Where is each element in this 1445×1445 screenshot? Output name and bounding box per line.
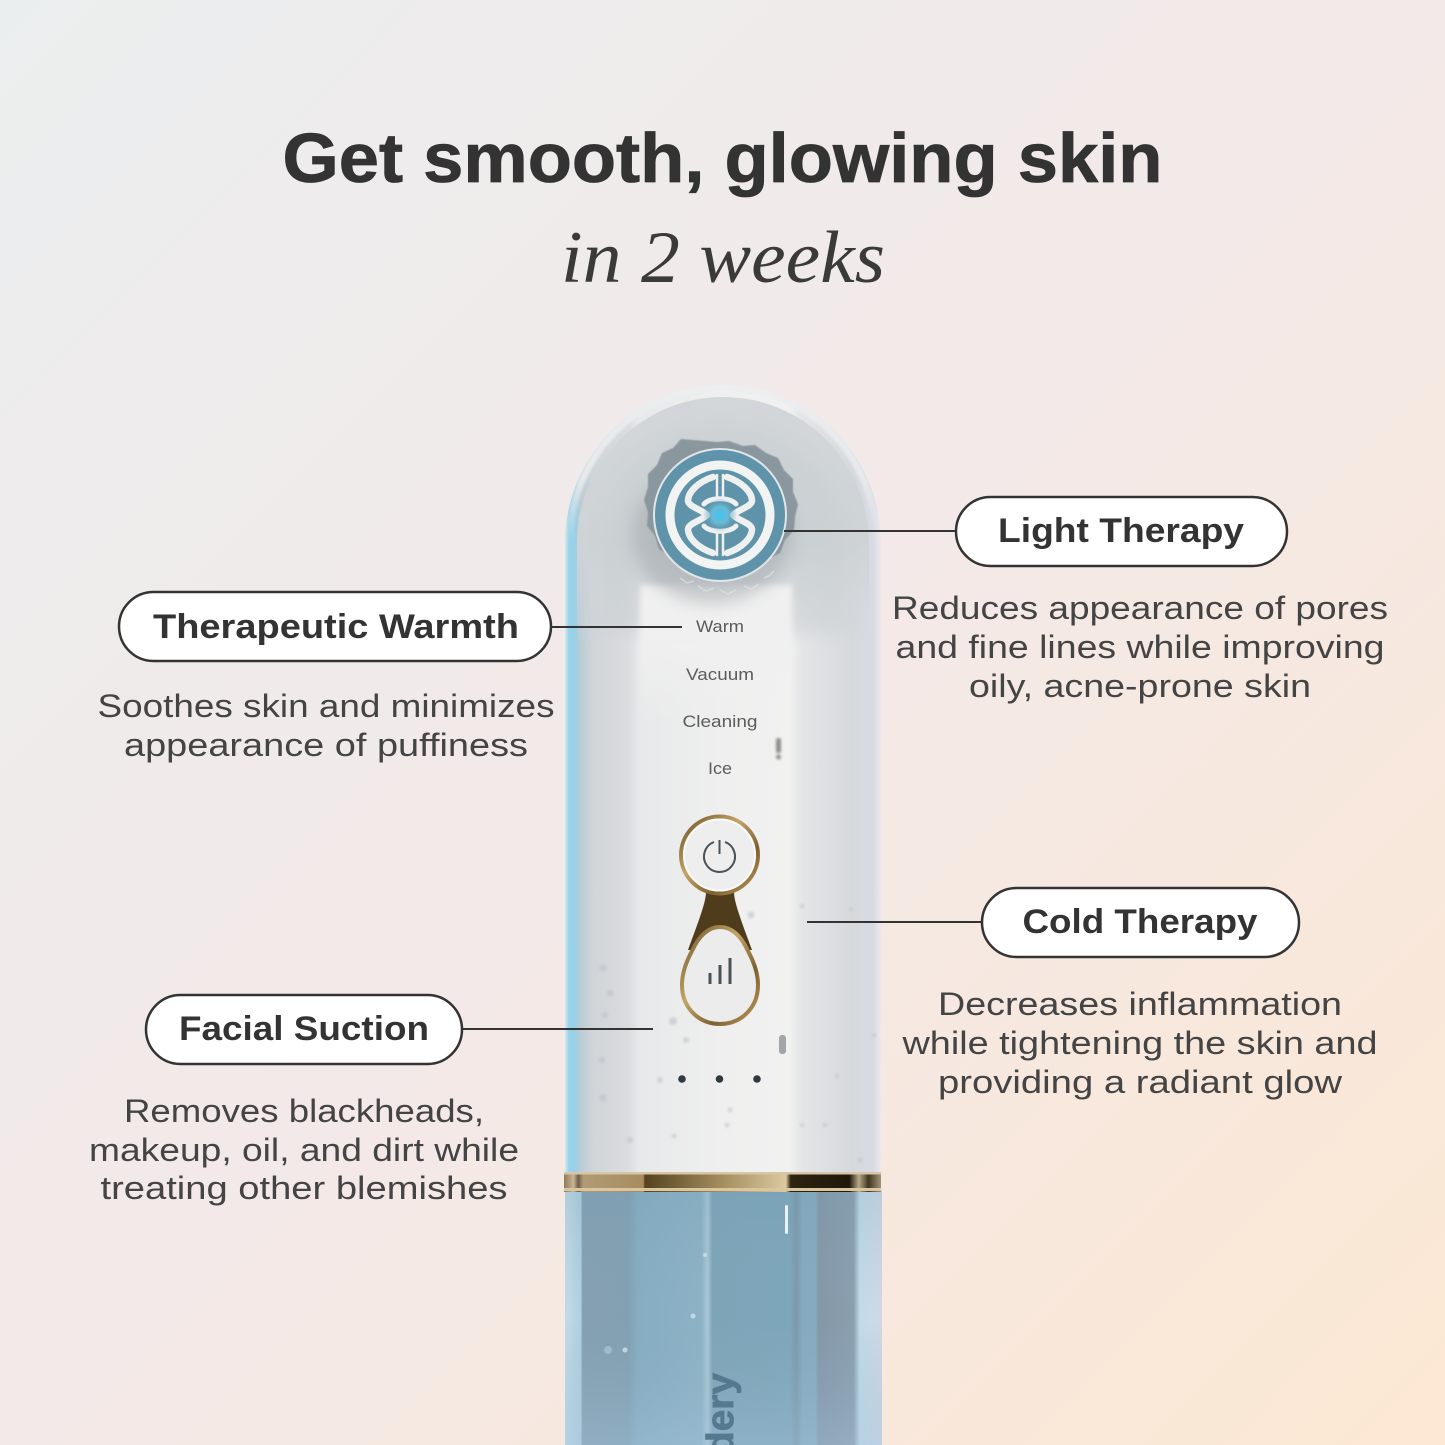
description: light therapy: oily, acne-prone skin	[969, 668, 1311, 704]
title: Get smooth, glowing skin	[282, 119, 1162, 197]
pill: therapeutic warmth: Therapeutic Warmth	[153, 608, 519, 646]
connector line	[551, 626, 682, 628]
scalloped highlights	[680, 571, 774, 594]
description: cold therapy	[901, 986, 1378, 1100]
sensor pattern	[688, 475, 752, 555]
product: facial device	[564, 385, 882, 1445]
pill: facial suction: Facial Suction	[179, 1010, 429, 1048]
indicator dots	[678, 1075, 761, 1083]
description: therapeutic warmth: appearance of puffiness	[124, 727, 528, 763]
subtitle: in 2 weeks	[561, 217, 885, 299]
description: cold therapy: while tightening the skin and	[901, 1025, 1378, 1061]
pill: light therapy: Light Therapy	[998, 512, 1244, 550]
mode labels	[682, 617, 758, 778]
mode labels: Warm	[696, 617, 744, 636]
callout: light therapy	[784, 497, 1388, 704]
callout: therapeutic warmth	[98, 592, 682, 763]
pill: facial suction	[146, 995, 462, 1064]
connector line	[807, 921, 982, 923]
pill: light therapy	[956, 497, 1287, 566]
pill: therapeutic warmth	[119, 592, 551, 661]
gold control frame	[681, 816, 758, 1024]
pill: cold therapy: Cold Therapy	[1022, 903, 1258, 941]
connector line	[784, 530, 956, 532]
description: therapeutic warmth	[98, 688, 554, 763]
description: cold therapy: Decreases inflammation	[938, 986, 1342, 1022]
description: facial suction: Removes blackheads,	[124, 1093, 484, 1129]
icon: intensity bars	[710, 958, 730, 984]
callout: facial suction	[89, 995, 653, 1206]
description: light therapy: Reduces appearance of pores	[892, 590, 1388, 626]
indicator mark	[776, 738, 781, 760]
description: facial suction: treating other blemishes	[100, 1170, 508, 1206]
device lower water tank	[565, 1190, 882, 1445]
mode labels: Vacuum	[686, 665, 754, 684]
pill: cold therapy	[982, 888, 1299, 957]
icon: power	[704, 840, 735, 872]
description: cold therapy: providing a radiant glow	[938, 1064, 1343, 1100]
mode labels: Ice	[708, 759, 732, 778]
callout: cold therapy	[807, 888, 1378, 1100]
side slot	[779, 1035, 786, 1054]
connector line	[462, 1028, 653, 1030]
description: therapeutic warmth: Soothes skin and minimizes	[98, 688, 554, 724]
gold band	[564, 1172, 881, 1192]
water droplets	[599, 904, 876, 1162]
description: facial suction: makeup, oil, and dirt while	[89, 1132, 519, 1168]
light therapy head	[644, 439, 798, 594]
device upper white body	[565, 385, 881, 1172]
mode labels: Cleaning	[682, 712, 758, 731]
description: light therapy: and fine lines while improving	[896, 629, 1384, 665]
description: facial suction	[89, 1093, 519, 1206]
description: light therapy	[892, 590, 1388, 704]
